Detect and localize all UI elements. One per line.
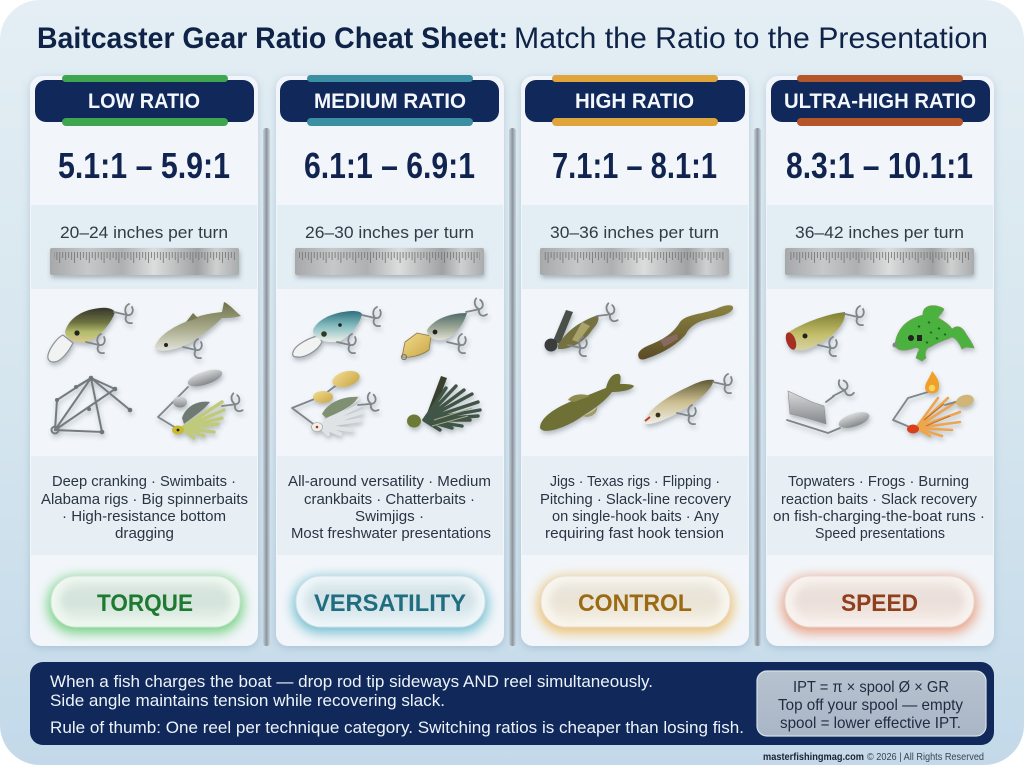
- description text: Topwaters · Frogs · Burning: [788, 473, 969, 490]
- formula glass box: [757, 671, 986, 736]
- band: inches per turn: [522, 205, 748, 289]
- description text: Jigs · Texas rigs · Flipping ·: [550, 473, 720, 490]
- description text: · High-resistance bottom: [62, 508, 226, 525]
- description text: [41, 473, 248, 542]
- pill: control: CONTROL: [578, 590, 692, 617]
- pill: versatility: VERSATILITY: [314, 590, 466, 617]
- description text: Deep cranking · Swimbaits ·: [52, 473, 236, 490]
- vertical rod divider 2: [509, 128, 516, 646]
- description text: Speed presentations: [815, 525, 945, 542]
- description text: All-around versatility · Medium: [288, 473, 491, 490]
- panel: low ratio: [30, 75, 258, 646]
- band: inches per turn: [277, 205, 503, 289]
- lure: jig with trailer: [544, 302, 618, 356]
- tip text: [50, 672, 744, 737]
- lure: buzzbait: [787, 378, 871, 433]
- description text: dragging: [115, 525, 174, 542]
- description text: on single-hook baits · Any: [552, 508, 719, 525]
- description text: crankbaits · Chatterbaits ·: [304, 491, 475, 508]
- gear ratio range: 8.3:1 – 10.1:1: [786, 145, 973, 186]
- tip text: Side angle maintains tension while recovering slack.: [50, 691, 445, 710]
- ruler: [295, 248, 484, 275]
- pill: control: [538, 576, 733, 633]
- lure: orange spinnerbait: [893, 371, 975, 436]
- header bar: [525, 75, 745, 126]
- lure: spinnerbait: [158, 366, 243, 438]
- description text: [540, 473, 731, 542]
- card background: [276, 76, 504, 646]
- lure: worm: [638, 305, 733, 360]
- inches per turn: 20–24 inches per turn: [60, 223, 228, 242]
- gear ratio range: 5.1:1 – 5.9:1: [58, 145, 230, 186]
- pill: speed: SPEED: [841, 590, 918, 617]
- header bar: [35, 75, 254, 126]
- title: Baitcaster Gear Ratio Cheat Sheet:: [37, 22, 508, 55]
- ruler: [785, 248, 974, 275]
- lure: jig: [407, 376, 480, 430]
- band: description: [277, 456, 503, 555]
- ruler: [540, 248, 729, 275]
- band: description: [31, 456, 257, 555]
- tip text: When a fish charges the boat — drop rod tip sideways AND reel simultaneously.: [50, 672, 653, 691]
- description text: Most freshwater presentations: [291, 525, 491, 542]
- lure: alabama rig: [52, 376, 132, 434]
- card background: [30, 76, 258, 646]
- description text: Alabama rigs · Big spinnerbaits: [41, 491, 248, 508]
- bottom tips banner: [30, 662, 994, 745]
- lure: swimbait: [155, 302, 241, 358]
- band: description: [767, 456, 993, 555]
- panel: high ratio: [521, 75, 749, 646]
- formula glass box: Top off your spool — empty: [778, 697, 963, 714]
- card background: [766, 76, 994, 646]
- lure: crankbait: [48, 304, 133, 362]
- title: [37, 22, 988, 55]
- description text: on fish-charging-the-boat runs ·: [773, 508, 985, 525]
- lure: chatterbait: [402, 297, 488, 360]
- band: inches per turn: [31, 205, 257, 289]
- header bar: [280, 75, 499, 126]
- pill: torque: TORQUE: [97, 590, 193, 617]
- copyright credit: masterfishingmag.com: [763, 752, 864, 763]
- inches per turn: 26–30 inches per turn: [305, 223, 474, 242]
- inches per turn: 30–36 inches per turn: [550, 223, 719, 242]
- description text: reaction baits · Slack recovery: [781, 491, 977, 508]
- lure: frog: [892, 306, 974, 361]
- lure: popper: [784, 306, 864, 356]
- header bar: MEDIUM RATIO: [314, 90, 466, 113]
- band: inches per turn: [767, 205, 993, 289]
- description text: [773, 473, 985, 542]
- pill: torque: [48, 576, 243, 633]
- ruler: [50, 248, 239, 275]
- band: description: [522, 456, 748, 555]
- description text: [288, 473, 491, 542]
- title: Match the Ratio to the Presentation: [514, 22, 988, 55]
- description text: Pitching · Slack-line recovery: [540, 491, 731, 508]
- panel: ultra-high ratio: [766, 75, 994, 646]
- formula glass box: IPT = π × spool Ø × GR: [793, 679, 949, 696]
- lure: jerkbait: [645, 374, 732, 424]
- header bar: [771, 75, 990, 126]
- gear ratio range: 7.1:1 – 8.1:1: [552, 145, 717, 186]
- pill: speed: [782, 576, 977, 633]
- card background: [521, 76, 749, 646]
- pill: versatility: [293, 576, 488, 633]
- tip text: Rule of thumb: One reel per technique category. Switching ratios is cheaper than losing fish.: [50, 718, 744, 737]
- lure: gold spinnerbait: [292, 368, 379, 434]
- copyright credit: © 2026 | All Rights Reserved: [867, 752, 984, 763]
- lure: teal crankbait: [293, 307, 381, 357]
- formula glass box: spool = lower effective IPT.: [780, 715, 961, 732]
- copyright credit: [763, 752, 984, 763]
- description text: Swimjigs ·: [355, 508, 424, 525]
- description text: requiring fast hook tension: [545, 525, 724, 542]
- panel: medium ratio: [276, 75, 504, 646]
- header bar: LOW RATIO: [88, 90, 200, 113]
- gear ratio range: 6.1:1 – 6.9:1: [304, 145, 475, 186]
- vertical rod divider 3: [754, 128, 761, 646]
- vertical rod divider 1: [263, 128, 270, 646]
- header bar: HIGH RATIO: [575, 90, 694, 113]
- inches per turn: 36–42 inches per turn: [795, 223, 964, 242]
- header bar: ULTRA-HIGH RATIO: [784, 90, 976, 113]
- lure: creature bait: [540, 374, 634, 431]
